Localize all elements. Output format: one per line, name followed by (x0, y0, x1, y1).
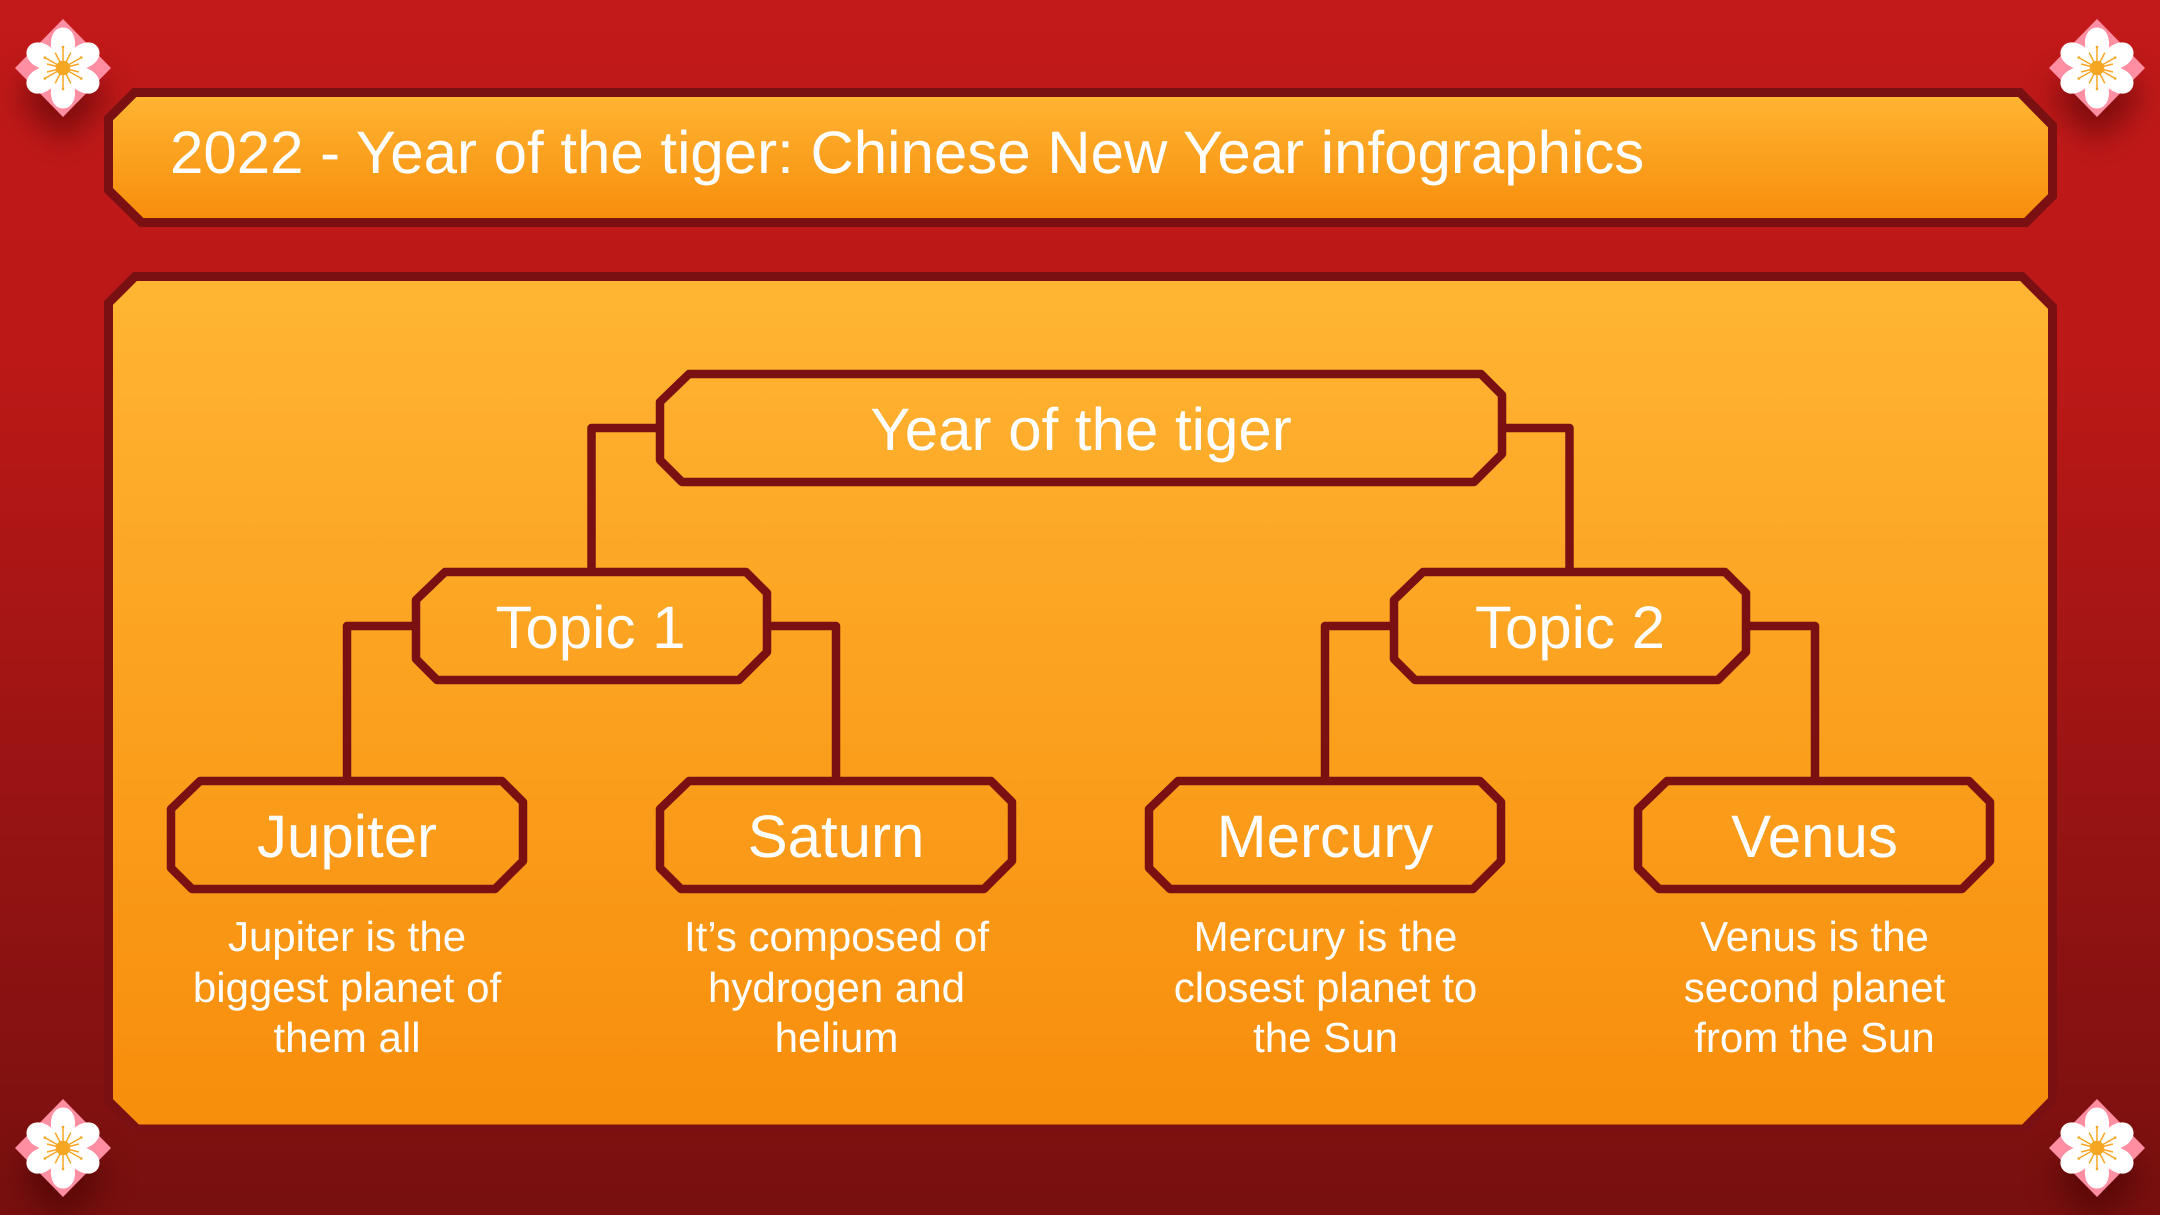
icon: flower top right (2049, 19, 2145, 142)
node: Mercury (1149, 781, 1501, 889)
connector: root to Topic 2 (1502, 428, 1570, 572)
node: Topic 2 (1394, 572, 1746, 680)
connector: root to Topic 1 (592, 428, 660, 572)
connector: Topic 1 to Saturn (767, 626, 836, 781)
node: Topic 1: Topic 1 (495, 594, 686, 661)
title banner (108, 92, 2052, 222)
text: Saturn description: helium (775, 1014, 898, 1061)
text: Jupiter description: Jupiter is the (228, 913, 466, 960)
text: Venus description: second planet (1684, 964, 1946, 1011)
node: Year of the tiger: Year of the tiger (870, 396, 1292, 463)
node: Saturn: Saturn (748, 803, 924, 870)
text: Mercury description: Mercury is the (1194, 913, 1457, 960)
node: Topic 1 (416, 572, 767, 680)
text: Jupiter description: biggest planet of (193, 964, 501, 1011)
panel: main content (108, 276, 2052, 1129)
text: Mercury description: closest planet to (1174, 964, 1477, 1011)
connector: Topic 1 to Jupiter (347, 626, 416, 781)
node: Venus: Venus (1731, 803, 1898, 870)
text: Saturn description: It’s composed of (684, 913, 989, 960)
title: 2022 - Year of the tiger: Chinese New Year infographics (170, 119, 1644, 186)
node: Topic 2: Topic 2 (1475, 594, 1665, 661)
icon: flower bottom left (15, 1099, 111, 1215)
node: Mercury: Mercury (1217, 803, 1433, 870)
connector: Topic 2 to Mercury (1325, 626, 1394, 781)
node: Venus (1638, 781, 1990, 889)
text: Mercury description: the Sun (1253, 1014, 1398, 1061)
node: Jupiter (171, 781, 523, 889)
icon: flower top left (15, 19, 111, 142)
text: Saturn description: hydrogen and (708, 964, 965, 1011)
text: Jupiter description: them all (273, 1014, 421, 1061)
node: Jupiter: Jupiter (257, 803, 437, 870)
node: Saturn (660, 781, 1012, 889)
icon: flower bottom right (2049, 1099, 2145, 1215)
node: Year of the tiger (660, 374, 1502, 482)
text: Venus description: from the Sun (1694, 1014, 1935, 1061)
text: Venus description: Venus is the (1700, 913, 1929, 960)
connector: Topic 2 to Venus (1746, 626, 1815, 781)
